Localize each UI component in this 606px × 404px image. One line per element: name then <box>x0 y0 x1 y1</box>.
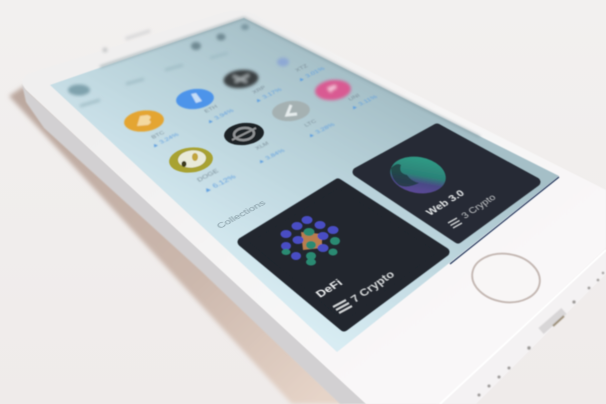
title: DeFi: DeFi <box>313 277 345 300</box>
coin percentage changes: ▲ 3.28% <box>306 122 337 139</box>
charging port and speaker holes <box>478 272 604 396</box>
coin: pink <box>314 78 352 102</box>
heading: Collections: Collections <box>215 199 268 231</box>
edge highlight <box>440 250 606 404</box>
coin labels: XTZ <box>295 64 310 73</box>
coin: DOGE <box>168 145 214 175</box>
coin labels: BTC <box>151 130 167 140</box>
title: Web 3.0: Web 3.0 <box>424 188 467 218</box>
earpiece and camera <box>102 29 151 52</box>
home button <box>469 249 543 307</box>
coin labels: XRP <box>252 85 267 95</box>
icon: list menu <box>448 218 462 228</box>
label: 7 Crypto: 7 Crypto <box>349 269 397 305</box>
coin labels: ETH <box>204 105 219 114</box>
phone screen <box>50 18 559 352</box>
coin percentage changes: ▲ 3.94% <box>205 108 236 125</box>
coin labels <box>151 64 362 183</box>
coin: LTC <box>271 99 311 123</box>
coin: XLM <box>223 121 265 147</box>
coin percentage changes: ▲ 3.17% <box>253 87 284 104</box>
icon: globe <box>387 152 449 198</box>
coin percentage changes: ▲ 6.12% <box>201 173 238 194</box>
coin percentage changes <box>150 66 379 194</box>
label: 3 Crypto: 3 Crypto <box>460 193 498 221</box>
coin labels: LTC <box>304 119 319 128</box>
screen top edge shade <box>100 18 480 137</box>
coin labels: XLM <box>255 141 270 151</box>
screen lower edge line <box>450 177 559 264</box>
card: Web 3.0 <box>357 128 536 239</box>
coin percentage changes: ▲ 3.11% <box>349 94 379 111</box>
card: DeFi <box>242 183 445 327</box>
status and top bar icons <box>68 24 289 106</box>
coin: ETH <box>175 87 215 111</box>
coin labels: UNI <box>348 93 362 102</box>
coin percentage changes: ▲ 3.24% <box>150 132 181 149</box>
coin percentage changes: ▲ 3.84% <box>256 148 287 165</box>
phone cast shadow <box>9 86 345 404</box>
icon: cube lattice <box>280 216 340 266</box>
coin labels: DOGE <box>196 168 221 183</box>
coin: XRP <box>223 68 259 90</box>
phone side edges <box>22 84 606 404</box>
coin: BTC <box>123 108 165 134</box>
icon: list menu <box>333 300 352 313</box>
coin percentage changes: ▲ 3.01% <box>296 66 327 83</box>
